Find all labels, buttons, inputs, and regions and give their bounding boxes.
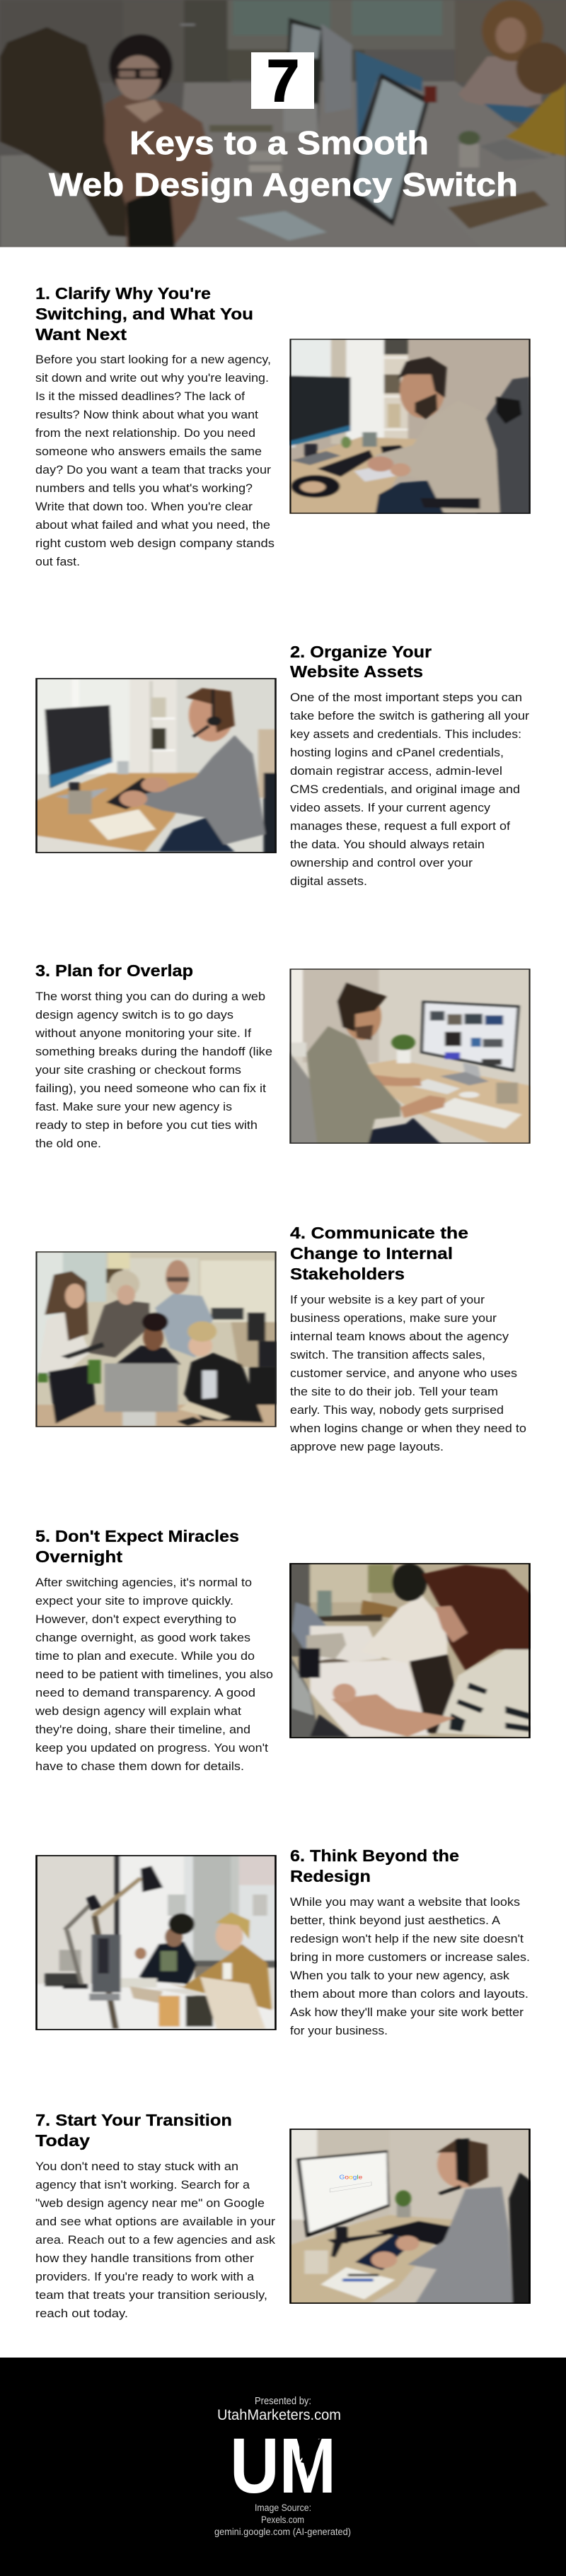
text block: step 2: [290, 691, 530, 888]
text block: step 7: area. Reach out to a few agencies and ask: [35, 2234, 276, 2247]
text block: step 1: sit down and write out why you're leaving.: [35, 372, 269, 385]
text block: step 6: better, think beyond just aesthetics. A: [290, 1914, 500, 1927]
text block: step 3: the old one.: [35, 1137, 101, 1150]
text block: step 2: video assets. If your current agency: [290, 802, 491, 814]
image source credit: Image Source:: [255, 2502, 311, 2513]
search page logo: [330, 2174, 371, 2192]
hero office photo: [0, 0, 566, 247]
text block: step 1: numbers and tells you what's working?: [35, 482, 253, 495]
text block: step 1: Is it the missed deadlines? The lack of: [35, 390, 245, 403]
heading: step 4: 4. Communicate the: [290, 1224, 468, 1242]
text block: step 3: ready to step in before you cut ties with: [35, 1119, 258, 1132]
text block: step 1: Before you start looking for a new agency,: [35, 353, 271, 366]
text block: step 6: them about more than colors and layouts.: [290, 1988, 529, 2001]
panel: step 3: [35, 961, 533, 1150]
text block: step 4: switch. The transition affects sales,: [290, 1349, 485, 1362]
text block: step 7: and see what options are available in your: [35, 2215, 276, 2228]
text block: step 3: design agency switch is to go days: [35, 1009, 233, 1021]
text block: step 5: keep you updated on progress. You won't: [35, 1742, 268, 1755]
text block: step 7: team that treats your transition seriously,: [35, 2289, 267, 2302]
text block: step 5: [35, 1576, 273, 1773]
photo: man with headset at monitor: [34, 677, 278, 855]
heading: step 7: 7. Start Your Transition: [35, 2111, 232, 2129]
text block: step 3: your site crashing or checkout forms: [35, 1064, 241, 1077]
heading: step 2: [290, 643, 432, 681]
text block: step 5: need to demand transparency. A good: [35, 1687, 255, 1699]
heading: step 5: [35, 1527, 239, 1566]
text block: step 2: the data. You should always retain: [290, 838, 485, 851]
heading: step 2: 2. Organize Your: [290, 643, 432, 661]
text block: step 6: redesign won't help if the new site doesn't: [290, 1933, 524, 1945]
photo: team around laptop: [34, 1251, 278, 1429]
title: [49, 124, 518, 203]
text block: step 7: reach out today.: [35, 2307, 128, 2320]
photo: man writing at desk: [288, 338, 533, 516]
text block: step 3: [35, 990, 272, 1150]
text block: step 5: expect your site to improve quickly.: [35, 1595, 233, 1608]
text block: step 3: without anyone monitoring your site. If: [35, 1027, 251, 1040]
number badge: 7: [267, 47, 299, 114]
text block: step 1: day? Do you want a team that tracks your: [35, 464, 272, 476]
text block: step 2: digital assets.: [290, 875, 367, 888]
text block: step 2: manages these, request a full export of: [290, 820, 510, 833]
panel: step 4: [34, 1224, 526, 1453]
text block: step 2: CMS credentials, and original image and: [290, 783, 520, 796]
heading: step 4: Change to Internal: [290, 1244, 453, 1263]
text block: step 4: early. This way, nobody gets surprised: [290, 1404, 504, 1417]
text block: step 5: have to chase them down for details.: [35, 1760, 244, 1773]
panel: step 1: [35, 284, 533, 568]
footer: [0, 2358, 566, 2576]
heading: step 3: 3. Plan for Overlap: [35, 961, 193, 980]
panel: step 2: [34, 643, 530, 888]
text block: step 4: when logins change or when they need to: [289, 1422, 526, 1435]
text block: step 4: customer service, and anyone who uses: [290, 1367, 517, 1380]
text block: step 2: One of the most important steps you can: [290, 691, 522, 704]
heading: step 7: [35, 2111, 232, 2150]
heading: step 6: Redesign: [290, 1867, 371, 1885]
presented by credit: [217, 2396, 341, 2423]
panel: step 5: [35, 1527, 533, 1773]
text block: step 6: When you talk to your new agency, ask: [290, 1969, 510, 1982]
heading: step 1: 1. Clarify Why You're: [35, 284, 211, 303]
photo: woman typing on laptop: [288, 1562, 533, 1738]
heading: step 1: Switching, and What You: [35, 305, 253, 323]
text block: step 1: from the next relationship. Do you need: [35, 427, 255, 440]
text block: step 5: they're doing, share their timeline, and: [35, 1723, 250, 1736]
text block: step 7: how they handle transitions from other: [35, 2252, 255, 2265]
text block: step 6: Ask how they'll make your site work better: [290, 2006, 524, 2019]
text block: step 2: ownership and control over your: [290, 857, 473, 870]
heading: step 6: [290, 1846, 459, 1885]
image source credit: Pexels.com: [261, 2514, 304, 2525]
text block: step 7: "web design agency near me" on Google: [35, 2197, 265, 2210]
heading: step 5: Overnight: [35, 1547, 122, 1566]
text block: step 2: domain registrar access, admin-level: [290, 765, 502, 778]
title: Keys to a Smooth: [129, 124, 429, 161]
text block: step 3: fast. Make sure your new agency is: [35, 1101, 232, 1113]
hero banner: [0, 0, 566, 247]
text block: step 5: web design agency will explain what: [35, 1705, 241, 1718]
text block: step 1: out fast.: [35, 556, 80, 568]
text block: step 7: providers. If you're ready to work with a: [35, 2271, 255, 2283]
text block: step 2: take before the switch is gathering all your: [290, 710, 530, 722]
heading: step 5: 5. Don't Expect Miracles: [35, 1527, 239, 1545]
text block: step 1: about what failed and what you need, the: [35, 519, 270, 532]
text block: step 5: need to be patient with timelines, you also: [35, 1668, 273, 1681]
heading: step 4: Stakeholders: [290, 1265, 405, 1283]
presented by credit: Presented by:: [255, 2396, 311, 2407]
text block: step 1: Write that down too. When you're clear: [35, 500, 253, 513]
title: Web Design Agency Switch: [49, 166, 518, 203]
search page logo: Google: [340, 2174, 363, 2181]
text block: step 5: However, don't expect everything to: [35, 1613, 236, 1626]
presented by credit: UtahMarketers.com: [217, 2407, 341, 2423]
text block: step 1: someone who answers emails the same: [35, 445, 262, 458]
text block: step 6: While you may want a website that looks: [290, 1896, 520, 1909]
image source credit: [214, 2502, 351, 2537]
text block: step 6: [290, 1896, 530, 2037]
text block: step 7: You don't need to stay stuck with an: [35, 2160, 238, 2173]
text block: step 1: right custom web design company stands: [35, 537, 275, 550]
text block: step 5: After switching agencies, it's normal to: [35, 1576, 252, 1589]
text block: step 1: [35, 353, 275, 568]
text block: step 4: approve new page layouts.: [290, 1441, 444, 1453]
text block: step 5: time to plan and execute. While you do: [35, 1650, 255, 1663]
logo: UM with mountain: UM: [230, 2423, 336, 2510]
text block: step 3: The worst thing you can do during a web: [35, 990, 265, 1003]
text block: step 6: for your business.: [290, 2025, 388, 2037]
heading: step 1: [35, 284, 253, 344]
heading: step 6: 6. Think Beyond the: [290, 1846, 459, 1865]
heading: step 7: Today: [35, 2131, 90, 2150]
photo: office desk with desk lamps: [34, 1854, 278, 2031]
heading: step 2: Website Assets: [290, 662, 423, 681]
text block: step 4: If your website is a key part of your: [290, 1294, 485, 1306]
text block: step 7: agency that isn't working. Search for a: [35, 2179, 250, 2191]
heading: step 4: [290, 1224, 468, 1283]
heading: step 1: Want Next: [35, 325, 127, 344]
panel: step 7: [35, 2111, 533, 2320]
text block: step 5: change overnight, as good work takes: [35, 1632, 250, 1644]
text block: step 3: failing), you need someone who can fix it: [35, 1082, 266, 1095]
photo: man at desk with website grid monitor: [288, 968, 533, 1145]
text block: step 3: something breaks during the handoff (like: [35, 1046, 272, 1058]
image source credit: gemini.google.com (AI-generated): [214, 2527, 351, 2537]
text block: step 7: [35, 2160, 276, 2320]
text block: step 2: hosting logins and cPanel credentials,: [290, 747, 504, 759]
text block: step 6: bring in more customers or increase sales.: [290, 1951, 530, 1964]
text block: step 1: results? Now think about what you want: [35, 409, 258, 421]
number badge: [251, 47, 314, 114]
text block: step 4: business operations, make sure your: [290, 1312, 497, 1325]
text block: step 2: key assets and credentials. This includes:: [290, 728, 521, 741]
photo: man with headset viewing search page: [288, 2128, 533, 2305]
text block: step 4: the site to do their job. Tell your team: [290, 1386, 498, 1398]
text block: step 4: [289, 1294, 526, 1453]
text block: step 4: internal team knows about the agency: [290, 1330, 509, 1343]
panel: step 6: [34, 1846, 530, 2037]
